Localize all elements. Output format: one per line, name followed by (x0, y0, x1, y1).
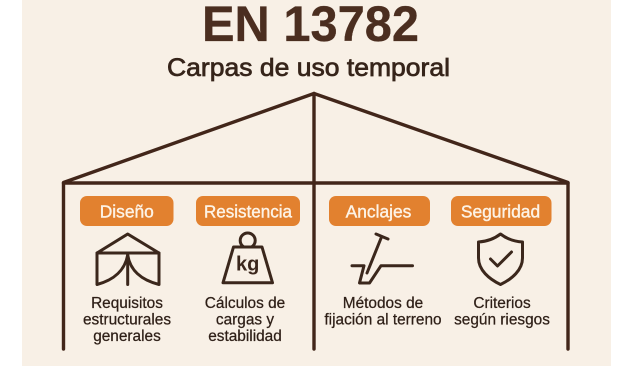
column: Anclajes (324, 196, 442, 328)
text: Diseño description: Requisitos (91, 295, 163, 312)
badge: Diseño (80, 196, 174, 226)
column: Diseño (80, 196, 174, 345)
icon: shield with check (478, 234, 522, 284)
text: Diseño description: generales (93, 328, 161, 345)
text: Resistencia description: cargas y (216, 312, 274, 328)
text: Seguridad description: Criterios (473, 295, 531, 312)
icon: tent (97, 234, 159, 284)
text: Resistencia description: Cálculos de (205, 295, 285, 312)
column: Seguridad (451, 196, 552, 328)
icon: kg weight: kg (236, 254, 259, 276)
badge: Resistencia: Resistencia (204, 202, 292, 222)
subtitle: Carpas de uso temporal (167, 54, 450, 82)
badge: Diseño: Diseño (100, 202, 154, 222)
tent frame (64, 94, 568, 349)
text: Resistencia description: estabilidad (208, 328, 282, 345)
icon: kg weight (223, 233, 272, 283)
text: Diseño description: estructurales (83, 312, 171, 328)
text: Anclajes description: fijación al terreno (324, 312, 442, 328)
icon: ground anchor (352, 234, 412, 283)
badge: Resistencia (196, 196, 300, 226)
badge: Seguridad: Seguridad (461, 202, 540, 222)
column: Resistencia (196, 196, 300, 345)
text: Seguridad description: según riesgos (454, 312, 550, 328)
text: Anclajes description: Métodos de (343, 295, 423, 312)
badge: Anclajes: Anclajes (346, 202, 412, 222)
